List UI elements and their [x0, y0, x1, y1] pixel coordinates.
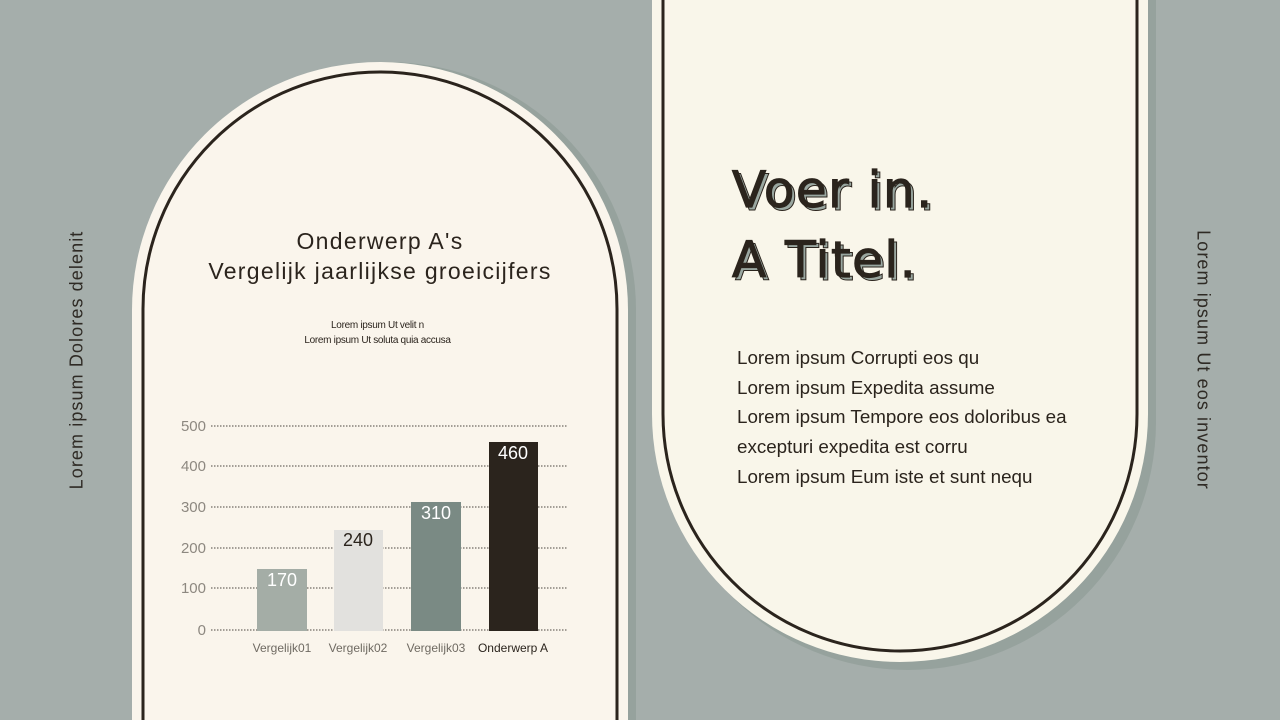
main title: A Titel. — [735, 234, 920, 292]
chart subtitle — [304, 320, 451, 346]
x-axis labels — [253, 641, 548, 655]
chart subtitle: Lorem ipsum Ut soluta quia accusa — [304, 335, 451, 346]
y-axis labels: 100 — [181, 580, 206, 597]
y-axis labels: 400 — [181, 458, 206, 475]
bars — [257, 442, 538, 631]
body text: Lorem ipsum Tempore eos doloribus ea — [737, 406, 1067, 427]
side text left: Lorem ipsum Dolores delenit — [66, 231, 86, 489]
body text: Lorem ipsum Eum iste et sunt nequ — [737, 466, 1032, 487]
chart title: Vergelijk jaarlijkse groeicijfers — [208, 258, 552, 284]
y-axis labels: 300 — [181, 499, 206, 516]
body text: excepturi expedita est corru — [737, 436, 968, 457]
panel: right arch — [652, 0, 1156, 670]
x-axis labels: Vergelijk03 — [407, 641, 466, 655]
chart title — [208, 228, 552, 284]
body text: Lorem ipsum Expedita assume — [737, 377, 995, 398]
bar values: 170 — [267, 570, 297, 590]
chart title: Onderwerp A's — [296, 228, 464, 254]
main title: Voer in. — [735, 164, 937, 222]
x-axis labels: Onderwerp A — [478, 641, 548, 655]
y-axis labels: 200 — [181, 540, 206, 557]
side text right: Lorem ipsum Ut eos inventor — [1194, 230, 1214, 490]
bar values: 310 — [421, 503, 451, 523]
bar values — [267, 443, 528, 590]
panel: left arch — [132, 62, 636, 720]
y-axis labels — [181, 418, 206, 639]
x-axis labels: Vergelijk01 — [253, 641, 312, 655]
body text: Lorem ipsum Corrupti eos qu — [737, 347, 979, 368]
chart subtitle: Lorem ipsum Ut velit n — [331, 320, 424, 331]
main title — [732, 161, 937, 292]
bar values: 240 — [343, 530, 373, 550]
y-axis labels: 0 — [198, 622, 206, 639]
bar values: 460 — [498, 443, 528, 463]
main title: A Titel. — [732, 231, 917, 289]
main title: Voer in. — [732, 161, 934, 219]
body text — [737, 347, 1067, 487]
y-axis labels: 500 — [181, 418, 206, 435]
x-axis labels: Vergelijk02 — [329, 641, 388, 655]
